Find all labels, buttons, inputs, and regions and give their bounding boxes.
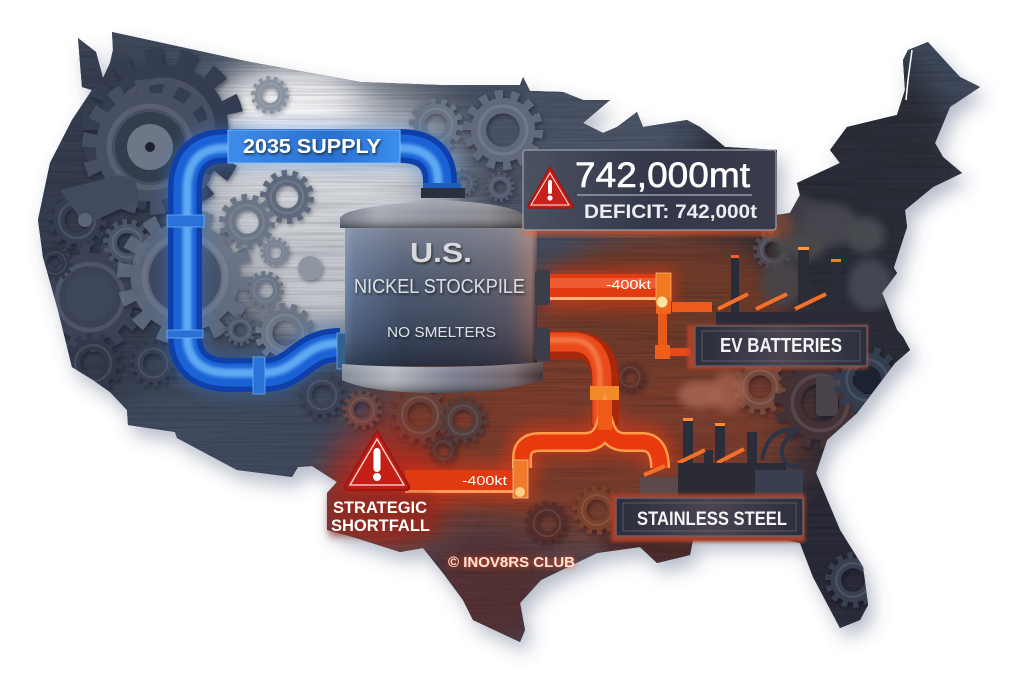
tank lid	[340, 200, 527, 228]
gears: northwest machinery	[40, 59, 234, 389]
flow label: -400kt	[606, 277, 651, 292]
icon: warning triangle	[528, 167, 573, 208]
orange pipe to stainless steel and shortfall	[405, 328, 660, 498]
pipe collars	[167, 215, 350, 394]
tank label: U.S.: U.S.	[410, 237, 472, 268]
pipe banner: 2035 supply: 2035 SUPPLY	[243, 136, 382, 158]
saw-tooth roofs	[718, 294, 826, 309]
headline figure: 742,000mt	[575, 156, 750, 195]
crescent emblem	[762, 429, 803, 466]
red glow around lower pipes	[330, 268, 675, 540]
alert label: STRATEGIC	[333, 498, 427, 517]
gears: red-tinted lower gears	[345, 233, 790, 542]
water-mark: copyright: © INOV8RS CLUB	[448, 555, 575, 571]
deficit line: DEFICIT: 742,000t	[584, 202, 758, 223]
deficit callout	[523, 150, 776, 234]
flow label: -400kt	[462, 473, 507, 488]
saw-tooth roofs	[644, 449, 744, 475]
plaque: stainless steel	[611, 494, 805, 542]
panel: nickel stockpile tank	[340, 183, 543, 393]
tank label: nickel stockpile: NICKEL STOCKPILE	[354, 276, 525, 298]
plaque: EV batteries: EV BATTERIES	[720, 335, 842, 357]
Maine sliver	[906, 50, 912, 100]
gears: translucent gear behind blue pipe	[127, 219, 243, 335]
EV batteries factory	[687, 247, 881, 369]
smokestacks	[731, 249, 841, 313]
smokestacks	[683, 420, 757, 482]
tank base	[342, 362, 543, 393]
alert label: SHORTFALL	[331, 516, 430, 535]
plaque: EV batteries	[687, 325, 868, 369]
orange pipe to EV batteries	[535, 270, 712, 359]
pipe banner: 2035 supply	[228, 130, 400, 163]
smoke over eastern factories	[678, 195, 892, 412]
tank label: no smelters: NO SMELTERS	[387, 324, 496, 341]
gears: southeast dark gears	[780, 351, 896, 604]
icon: warning triangle	[345, 431, 409, 490]
plaque: stainless steel: STAINLESS STEEL	[637, 509, 787, 530]
stainless steel factory	[611, 418, 805, 542]
blue supply pipe	[167, 130, 440, 394]
gears: central small gears	[223, 79, 537, 416]
alert label	[329, 494, 433, 536]
strategic shortfall alert	[329, 431, 433, 536]
